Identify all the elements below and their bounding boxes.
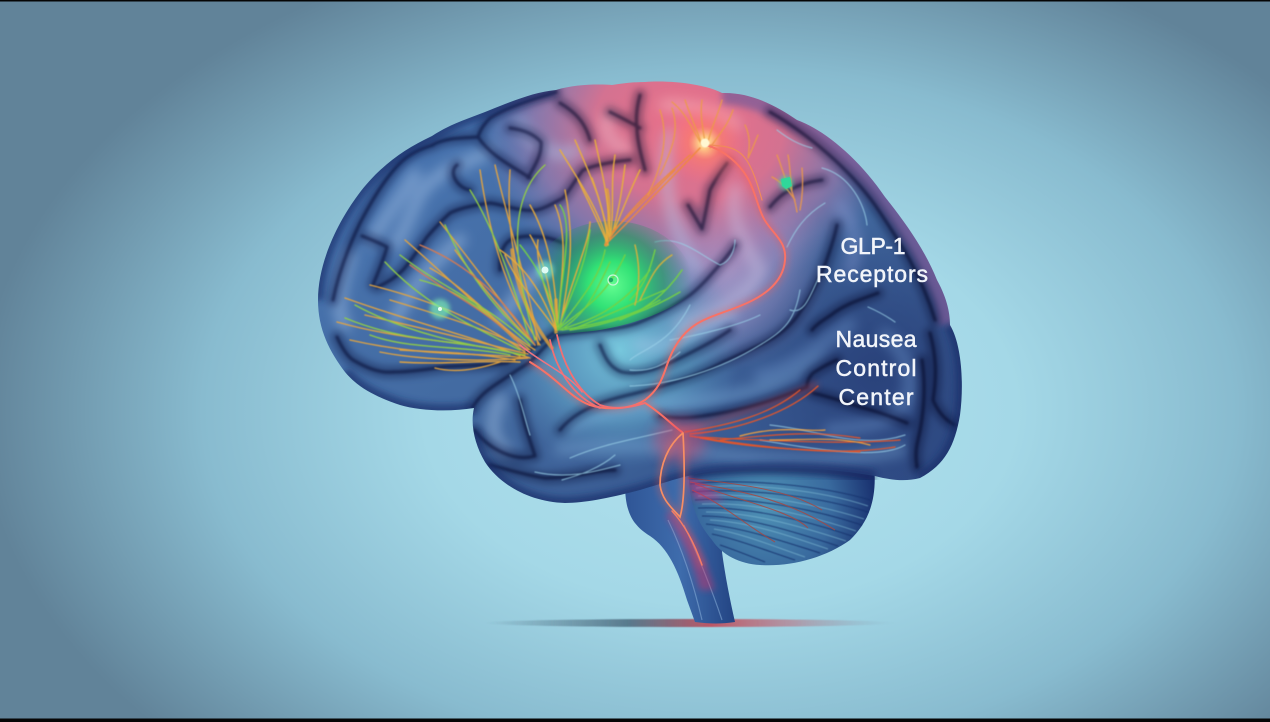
- receptor nodes: [430, 138, 793, 319]
- nerve trunks: [512, 190, 609, 348]
- pink signal pathway: [520, 145, 815, 432]
- brain illustration: [300, 70, 980, 624]
- warm glow: [670, 110, 736, 182]
- puffy gyri highlights: [340, 105, 910, 460]
- fold shadows: [333, 92, 955, 478]
- shadow under temporal lobe: [690, 469, 874, 478]
- pale blue vessels: [510, 130, 905, 480]
- outer rim shading: [318, 90, 962, 503]
- descending loop nerve: [660, 433, 702, 565]
- node: frontal: [430, 299, 450, 319]
- red glow at junction: [654, 418, 706, 462]
- label: Nausea Control Center: Nausea: [836, 326, 917, 352]
- lilac parietal region: [655, 204, 820, 358]
- fold lines: [333, 92, 955, 478]
- cyan central region: [516, 262, 726, 458]
- node: parietal green: [779, 176, 793, 190]
- label: GLP-1 Receptors: [816, 233, 928, 287]
- cerebrum base colour: [300, 70, 980, 510]
- cerebrum: [300, 70, 980, 510]
- label: GLP-1 Receptors: GLP-1: [840, 233, 906, 259]
- ground shadow: [485, 619, 895, 627]
- navy occipital shading: [753, 258, 953, 448]
- label: GLP-1 Receptors: Receptors: [816, 261, 928, 287]
- cerebellum: [684, 450, 875, 565]
- node: teal: [536, 261, 554, 279]
- nerve fan: upper: [560, 140, 700, 245]
- temporal nerve strands: [685, 386, 900, 452]
- nerve branches: upper motor: [648, 100, 803, 212]
- node: glowing motor: [700, 138, 710, 148]
- brain stem: [625, 460, 735, 624]
- label: Nausea Control Center: Center: [838, 384, 914, 410]
- green glow: [536, 221, 688, 334]
- label: Nausea Control Center: Control: [836, 355, 916, 381]
- nerve fan: frontal: [337, 165, 545, 370]
- nerve fan: central: [500, 190, 682, 330]
- node: green central: [608, 275, 618, 285]
- pink motor region: [491, 82, 866, 270]
- label: Nausea Control Center: [836, 326, 917, 410]
- purple outer rim: [722, 93, 950, 325]
